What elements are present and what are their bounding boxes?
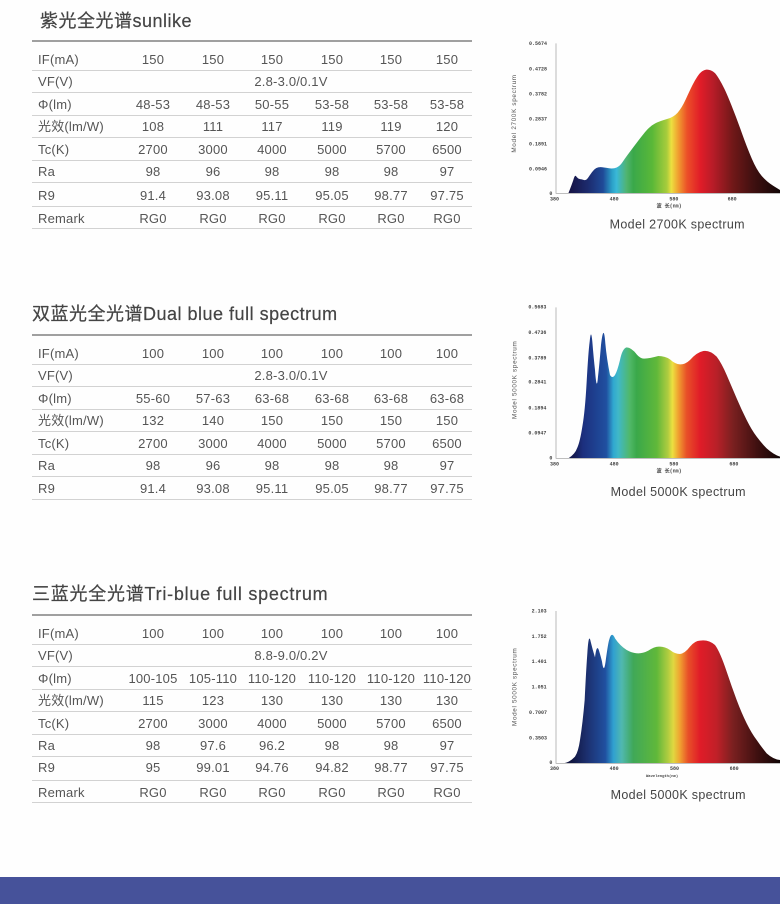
row: flux: 110-120 bbox=[423, 671, 471, 686]
row: efficacy: 115 bbox=[142, 693, 164, 708]
row: VF bbox=[32, 365, 472, 387]
row: remark: Remark bbox=[38, 785, 85, 800]
row: IF: 100 bbox=[321, 626, 343, 641]
row: efficacy: 120 bbox=[436, 119, 458, 134]
row: efficacy: 119 bbox=[380, 119, 402, 134]
row: R9: 94.82 bbox=[315, 760, 349, 775]
axis labels: 0.3503 bbox=[529, 735, 547, 741]
axes bbox=[556, 307, 780, 458]
axis labels: 1.401 bbox=[532, 659, 547, 665]
row: IF: 100 bbox=[380, 626, 402, 641]
row: IF bbox=[32, 616, 472, 645]
row: Ra: 97.6 bbox=[200, 738, 226, 753]
row: IF: IF(mA) bbox=[38, 626, 79, 641]
row: R9: 93.08 bbox=[196, 188, 230, 203]
row: R9: 95.11 bbox=[256, 188, 288, 203]
row: remark: RG0 bbox=[199, 785, 227, 800]
axis labels: 580 bbox=[669, 196, 678, 202]
row: Ra: 98 bbox=[325, 164, 339, 179]
row: IF: 100 bbox=[436, 346, 458, 361]
title: dual blue: 双蓝光全光谱Dual blue full spectrum bbox=[32, 304, 338, 324]
row: efficacy: 150 bbox=[261, 413, 283, 428]
row: Ra: 97 bbox=[440, 738, 454, 753]
row: VF: 8.8-9.0/0.2V bbox=[254, 648, 328, 663]
row: efficacy: 光效(lm/W) bbox=[38, 693, 104, 708]
row: efficacy: 140 bbox=[202, 413, 224, 428]
row: R9: R9 bbox=[38, 188, 55, 203]
row: Ra: 97 bbox=[440, 164, 454, 179]
row: remark: RG0 bbox=[433, 785, 461, 800]
row: VF: 2.8-3.0/0.1V bbox=[254, 368, 328, 383]
axis labels: 0.0946 bbox=[529, 166, 547, 172]
row: efficacy: 123 bbox=[202, 693, 224, 708]
axis labels: 0 bbox=[549, 191, 552, 197]
y axis title: Model 5000K spectrum bbox=[512, 648, 519, 726]
row: IF: 100 bbox=[202, 346, 224, 361]
row: flux: 48-53 bbox=[196, 97, 230, 112]
row: R9 bbox=[32, 184, 472, 207]
row: IF: IF(mA) bbox=[38, 346, 79, 361]
row: Ra: 98 bbox=[146, 458, 160, 473]
y axis title: Model 5000K spectrum bbox=[512, 341, 519, 419]
axis labels: 0.4728 bbox=[529, 66, 547, 72]
row: R9: 91.4 bbox=[140, 481, 166, 496]
row: Tc: 2700 bbox=[138, 142, 168, 157]
row: flux: Φ(lm) bbox=[38, 671, 72, 686]
axis labels: 0 bbox=[549, 760, 552, 766]
axis labels: 380 bbox=[550, 462, 559, 468]
axis labels: 波 长(nm) bbox=[657, 467, 682, 474]
row: remark bbox=[32, 781, 472, 803]
row: remark: RG0 bbox=[199, 211, 227, 226]
row: Ra bbox=[32, 161, 472, 183]
row: Tc: 5700 bbox=[376, 142, 406, 157]
row: Tc: Tc(K) bbox=[38, 716, 69, 731]
row: flux: 55-60 bbox=[136, 391, 170, 406]
row: Ra: 98 bbox=[384, 458, 398, 473]
axis labels: 0 bbox=[549, 455, 552, 461]
axis labels: 1.752 bbox=[532, 634, 547, 640]
row: VF: VF(V) bbox=[38, 74, 73, 89]
row: R9: R9 bbox=[38, 760, 55, 775]
axis labels: Wavelength(nm) bbox=[646, 774, 678, 779]
row: Ra: 96 bbox=[206, 164, 220, 179]
caption: Model 2700K spectrum bbox=[610, 217, 745, 231]
caption: Model 5000K spectrum bbox=[611, 788, 746, 802]
row: R9: 93.08 bbox=[196, 481, 230, 496]
axis labels: 680 bbox=[729, 462, 738, 468]
axis labels: 0.2837 bbox=[529, 116, 547, 122]
row: flux: 48-53 bbox=[136, 97, 170, 112]
row: Ra: 97 bbox=[440, 458, 454, 473]
row: flux bbox=[32, 668, 472, 690]
row: efficacy: 117 bbox=[261, 119, 283, 134]
row: IF: 150 bbox=[321, 52, 343, 67]
row: efficacy: 132 bbox=[142, 413, 164, 428]
axis labels bbox=[528, 305, 738, 474]
row: Tc: 5000 bbox=[317, 142, 347, 157]
table: tri-blue specifications bbox=[32, 614, 472, 804]
row: IF: IF(mA) bbox=[38, 52, 79, 67]
row: Tc: 6500 bbox=[432, 716, 462, 731]
row: R9 bbox=[32, 758, 472, 781]
row: Ra: 98 bbox=[384, 164, 398, 179]
axis labels: 0.5683 bbox=[528, 305, 546, 311]
row: Tc: 2700 bbox=[138, 716, 168, 731]
row: R9: 97.75 bbox=[430, 760, 464, 775]
row: flux: 57-63 bbox=[196, 391, 230, 406]
row: Ra: 96.2 bbox=[259, 738, 285, 753]
caption: Model 5000K spectrum bbox=[611, 485, 746, 499]
row: R9: 98.77 bbox=[374, 760, 408, 775]
row: efficacy: 119 bbox=[321, 119, 343, 134]
row: Ra: 98 bbox=[265, 458, 279, 473]
row: flux: 63-68 bbox=[255, 391, 289, 406]
row: IF: 100 bbox=[380, 346, 402, 361]
row: Ra: Ra bbox=[38, 164, 55, 179]
row: Ra: 98 bbox=[265, 164, 279, 179]
axis labels: 680 bbox=[728, 196, 737, 202]
row: Ra: Ra bbox=[38, 738, 55, 753]
row: flux: 63-68 bbox=[430, 391, 464, 406]
row: remark: RG0 bbox=[139, 785, 167, 800]
row: efficacy: 130 bbox=[321, 693, 343, 708]
row: Tc: Tc(K) bbox=[38, 436, 69, 451]
axis labels: 380 bbox=[550, 196, 559, 202]
row: flux bbox=[32, 94, 472, 116]
row: remark: RG0 bbox=[377, 211, 405, 226]
row: efficacy bbox=[32, 690, 472, 712]
row: R9: 99.01 bbox=[196, 760, 230, 775]
row: efficacy: 光效(lm/W) bbox=[38, 413, 104, 428]
row: Tc: 6500 bbox=[432, 436, 462, 451]
row: Tc: 3000 bbox=[198, 716, 228, 731]
row: flux: 105-110 bbox=[189, 671, 237, 686]
row: efficacy: 130 bbox=[380, 693, 402, 708]
row: efficacy: 130 bbox=[261, 693, 283, 708]
axis labels: 0.5674 bbox=[529, 41, 547, 47]
row: remark bbox=[32, 207, 472, 229]
row: efficacy bbox=[32, 116, 472, 138]
row: IF: 100 bbox=[142, 346, 164, 361]
row: R9: 95.11 bbox=[256, 481, 288, 496]
row: Tc: 4000 bbox=[257, 716, 287, 731]
row: Tc: 5000 bbox=[317, 436, 347, 451]
row: VF bbox=[32, 645, 472, 667]
row: VF: VF(V) bbox=[38, 648, 73, 663]
row: flux: 53-58 bbox=[374, 97, 408, 112]
row: Ra bbox=[32, 735, 472, 757]
row: Tc bbox=[32, 139, 472, 161]
row: Ra: Ra bbox=[38, 458, 55, 473]
chart: dual blue 5000K spectrum bbox=[512, 305, 780, 499]
row: flux: 63-68 bbox=[374, 391, 408, 406]
row: Tc: 3000 bbox=[198, 142, 228, 157]
axes bbox=[556, 43, 780, 193]
row: R9: 95 bbox=[146, 760, 160, 775]
axes bbox=[556, 611, 780, 763]
row: efficacy: 150 bbox=[436, 413, 458, 428]
row: R9: R9 bbox=[38, 481, 55, 496]
axis labels: 480 bbox=[610, 196, 619, 202]
row: IF: 100 bbox=[436, 626, 458, 641]
row: flux: 100-105 bbox=[128, 671, 178, 686]
row: VF: 2.8-3.0/0.1V bbox=[254, 74, 328, 89]
row: IF: 150 bbox=[436, 52, 458, 67]
axis labels: 480 bbox=[610, 766, 619, 772]
axis labels: 0.1894 bbox=[528, 405, 546, 411]
row: Ra: 98 bbox=[384, 738, 398, 753]
axis labels: 680 bbox=[730, 766, 739, 772]
axis labels: 0.1891 bbox=[529, 141, 547, 147]
row: R9: 98.77 bbox=[374, 188, 408, 203]
row: R9: 98.77 bbox=[374, 481, 408, 496]
row: R9: 95.05 bbox=[315, 188, 349, 203]
axis labels bbox=[529, 41, 737, 209]
table: sunlike specifications bbox=[32, 40, 472, 230]
curve: tri-blue area bbox=[556, 635, 780, 763]
row: R9: 97.75 bbox=[430, 481, 464, 496]
row: Tc: 5700 bbox=[376, 716, 406, 731]
row: flux: 110-120 bbox=[367, 671, 415, 686]
row: Tc: 5000 bbox=[317, 716, 347, 731]
row: Tc: 3000 bbox=[198, 436, 228, 451]
row: efficacy: 130 bbox=[436, 693, 458, 708]
row: efficacy: 111 bbox=[203, 119, 223, 134]
row: flux: 110-120 bbox=[248, 671, 296, 686]
row: IF: 150 bbox=[261, 52, 283, 67]
row: efficacy: 150 bbox=[380, 413, 402, 428]
row: flux: 63-68 bbox=[315, 391, 349, 406]
row: IF: 100 bbox=[261, 346, 283, 361]
row: IF: 150 bbox=[380, 52, 402, 67]
axis labels: 480 bbox=[610, 462, 619, 468]
curve: dual blue area bbox=[568, 333, 780, 458]
row: Tc bbox=[32, 433, 472, 455]
axis labels: 380 bbox=[550, 766, 559, 772]
row: flux: 110-120 bbox=[308, 671, 356, 686]
row: IF: 100 bbox=[321, 346, 343, 361]
title: sunlike: 紫光全光谱sunlike bbox=[40, 11, 192, 31]
y axis title: Model 2700K spectrum bbox=[511, 74, 518, 153]
axis labels: 波 长(nm) bbox=[657, 202, 682, 209]
row: Tc: 2700 bbox=[138, 436, 168, 451]
chart: tri-blue 5000K spectrum bbox=[512, 609, 780, 802]
row: remark: RG0 bbox=[318, 211, 346, 226]
axis labels: 0.3789 bbox=[528, 355, 546, 361]
row: remark: RG0 bbox=[139, 211, 167, 226]
title: tri-blue: 三蓝光全光谱Tri-blue full spectrum bbox=[32, 584, 328, 604]
row: Ra: 96 bbox=[206, 458, 220, 473]
row: remark: RG0 bbox=[258, 785, 286, 800]
table: dual blue specifications bbox=[32, 334, 472, 501]
row: Tc bbox=[32, 713, 472, 735]
row: flux: 50-55 bbox=[255, 97, 289, 112]
row: R9: 94.76 bbox=[255, 760, 289, 775]
row: R9: 95.05 bbox=[315, 481, 349, 496]
row: Ra: 98 bbox=[325, 458, 339, 473]
row: Tc: 4000 bbox=[257, 142, 287, 157]
row: IF bbox=[32, 336, 472, 365]
chart: 2700K spectrum bbox=[511, 41, 780, 231]
row: remark: RG0 bbox=[377, 785, 405, 800]
axis labels: 580 bbox=[670, 766, 679, 772]
axis labels: 0.3782 bbox=[529, 91, 547, 97]
axis labels: 1.051 bbox=[532, 684, 547, 690]
row: remark: RG0 bbox=[318, 785, 346, 800]
row: IF: 100 bbox=[142, 626, 164, 641]
row: Tc: 4000 bbox=[257, 436, 287, 451]
row: remark: Remark bbox=[38, 211, 85, 226]
row: IF: 100 bbox=[261, 626, 283, 641]
row: Tc: 6500 bbox=[432, 142, 462, 157]
axis labels: 580 bbox=[669, 462, 678, 468]
axis labels: 0.4736 bbox=[528, 330, 546, 336]
row: IF: 100 bbox=[202, 626, 224, 641]
row: Ra: 98 bbox=[146, 738, 160, 753]
axis labels bbox=[529, 609, 739, 779]
row: efficacy: 光效(lm/W) bbox=[38, 119, 104, 134]
row: VF bbox=[32, 71, 472, 93]
footer band bbox=[0, 877, 780, 904]
axis labels: 0.0947 bbox=[528, 430, 546, 436]
row: flux: Φ(lm) bbox=[38, 97, 72, 112]
row: Ra: 98 bbox=[146, 164, 160, 179]
row: Tc: 5700 bbox=[376, 436, 406, 451]
row: IF: 150 bbox=[142, 52, 164, 67]
row: flux: 53-58 bbox=[315, 97, 349, 112]
axis labels: 2.103 bbox=[532, 609, 547, 615]
row: efficacy bbox=[32, 410, 472, 432]
row: R9: 91.4 bbox=[140, 188, 166, 203]
row: Ra: 98 bbox=[325, 738, 339, 753]
axis labels: 0.2841 bbox=[528, 380, 546, 386]
row: IF bbox=[32, 42, 472, 71]
row: R9 bbox=[32, 478, 472, 500]
row: remark: RG0 bbox=[258, 211, 286, 226]
row: flux: Φ(lm) bbox=[38, 391, 72, 406]
row: R9: 97.75 bbox=[430, 188, 464, 203]
row: Tc: Tc(K) bbox=[38, 142, 69, 157]
row: efficacy: 150 bbox=[321, 413, 343, 428]
row: remark: RG0 bbox=[433, 211, 461, 226]
row: flux: 53-58 bbox=[430, 97, 464, 112]
row: VF: VF(V) bbox=[38, 368, 73, 383]
curve: 2700K area bbox=[568, 70, 780, 193]
row: flux bbox=[32, 388, 472, 410]
row: efficacy: 108 bbox=[142, 119, 164, 134]
row: Ra bbox=[32, 455, 472, 477]
row: IF: 150 bbox=[202, 52, 224, 67]
axis labels: 0.7007 bbox=[529, 710, 547, 716]
